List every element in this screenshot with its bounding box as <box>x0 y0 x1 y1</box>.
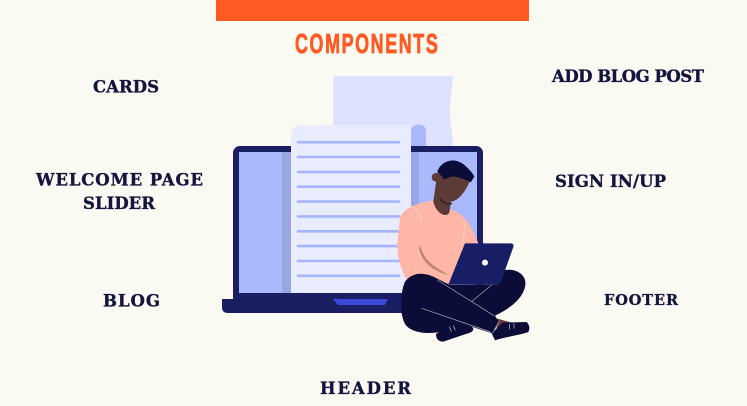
ankles <box>455 318 512 333</box>
neck shadow <box>440 199 452 204</box>
paper roll tab <box>411 124 426 146</box>
shoe laces <box>449 323 514 332</box>
front paper sheet <box>291 125 411 293</box>
shoe right <box>492 322 529 340</box>
trousers <box>401 270 525 333</box>
paper text lines <box>298 142 399 276</box>
label: header: HEADER <box>320 379 411 398</box>
laptop lid <box>233 146 483 301</box>
trouser seams <box>422 280 499 333</box>
label: cards: CARDS <box>93 78 159 96</box>
illustration: laptop with document <box>222 76 483 313</box>
arm shadow <box>419 245 448 275</box>
head and neck <box>433 168 471 215</box>
label: add blog post: ADD BLOG POST <box>551 67 705 86</box>
label: welcome page slider: SLIDER <box>83 194 155 213</box>
shoulder highlights <box>410 206 464 243</box>
laptop base <box>222 293 420 313</box>
ear <box>432 173 440 182</box>
hair <box>437 160 474 182</box>
header bar <box>216 0 529 21</box>
title: COMPONENTS <box>295 28 439 59</box>
label: blog: BLOG <box>103 292 160 310</box>
laptop screen <box>239 152 477 293</box>
screen shadow <box>282 152 419 293</box>
label: welcome page slider: WELCOME PAGE <box>35 170 203 190</box>
laptop logo <box>482 260 488 266</box>
illustration: person with laptop <box>397 160 529 342</box>
back paper sheet <box>333 76 453 150</box>
laptop notch <box>333 299 388 305</box>
label: sign in/up: SIGN IN/UP <box>555 172 666 191</box>
small laptop <box>448 243 514 285</box>
label: footer: FOOTER <box>604 292 679 309</box>
label: welcome page slider <box>35 170 203 213</box>
torso <box>397 200 479 285</box>
shoe left <box>436 322 473 342</box>
